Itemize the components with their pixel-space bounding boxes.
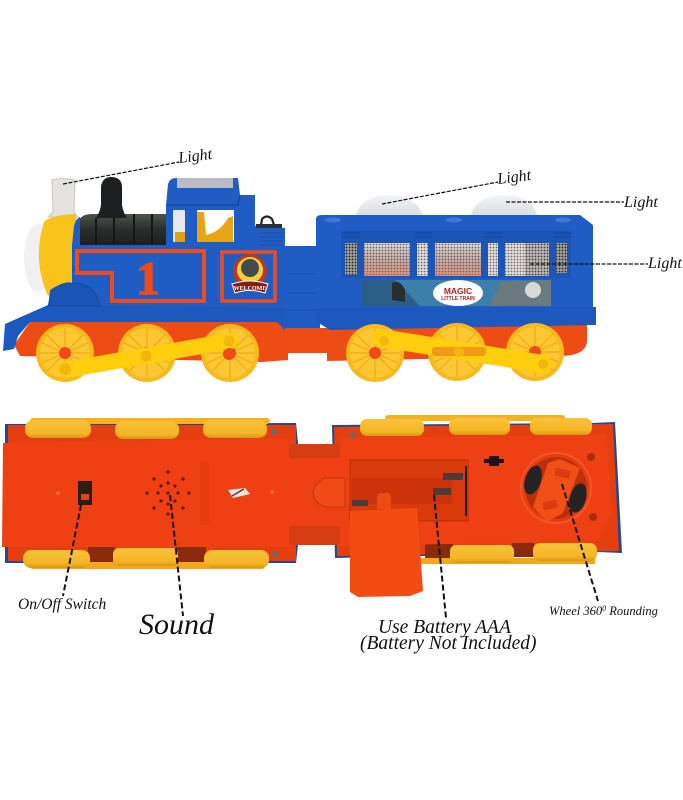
connector bar inner — [288, 458, 341, 526]
number panel outline — [77, 251, 204, 301]
locomotive connecting rod — [59, 336, 235, 375]
badge panel outline — [222, 252, 275, 301]
yellow smokebox — [39, 214, 76, 296]
callout: swivel wheel — [549, 484, 658, 618]
locomotive side view — [3, 177, 320, 382]
white front of boiler — [24, 224, 52, 292]
tender bottom strip — [420, 558, 595, 564]
callout: second dome light: Light — [623, 194, 658, 211]
keyhole slot — [484, 456, 504, 466]
tender base — [317, 307, 596, 330]
coupling — [285, 328, 330, 353]
orange recess — [8, 425, 296, 561]
tender top wheel strip — [385, 415, 565, 421]
tender sticker: LITTLE TRAIN — [441, 296, 475, 302]
tender sticker: MAGIC — [444, 286, 472, 296]
tender screw — [350, 432, 356, 438]
connector bar outer — [289, 444, 341, 545]
callout: sound: Sound — [139, 608, 215, 641]
callout: carriage light: Light — [647, 255, 682, 272]
underside view of tender — [288, 415, 622, 597]
callout: battery: (Battery Not Included) — [360, 633, 537, 654]
raised strip — [200, 462, 209, 525]
callout: swivel wheel: Rounding — [606, 604, 658, 618]
tender roof light domes — [356, 195, 537, 239]
tender window frame — [341, 231, 571, 278]
callout: first dome light: Light — [495, 167, 533, 188]
boiler ribs — [96, 214, 152, 244]
top wheels — [25, 420, 267, 439]
dark gaps between lower wheels — [88, 547, 115, 562]
swivel wheel housing — [521, 453, 591, 523]
bottom wheels — [23, 548, 269, 568]
locomotive wheels — [36, 324, 259, 382]
tender holes — [587, 453, 597, 521]
cab window left — [173, 210, 185, 242]
callout: swivel wheel: Wheel 360 — [549, 604, 602, 618]
locomotive body — [48, 178, 320, 328]
locomotive undercarriage — [14, 322, 288, 362]
tender base plate — [340, 435, 611, 546]
tender top wheels — [360, 418, 592, 436]
roof vent panel — [177, 178, 233, 188]
tender sticker — [362, 280, 551, 306]
callout: first dome light — [382, 167, 533, 204]
small logo mark — [228, 488, 250, 498]
cab window right — [197, 210, 234, 242]
tender carriage side view — [285, 195, 596, 382]
tender vents — [342, 233, 571, 237]
locomotive chimney light — [48, 178, 78, 217]
tender body — [316, 215, 593, 310]
dark gap between lower tender wheels — [425, 544, 453, 558]
speaker holes — [145, 470, 191, 516]
tender recess — [334, 424, 619, 556]
locomotive top wheel strip — [30, 418, 270, 424]
tender mesh windows — [345, 243, 567, 276]
on/off switch — [78, 481, 92, 505]
battery lid — [350, 493, 423, 597]
callout: battery — [360, 495, 537, 654]
battery compartment — [350, 460, 468, 521]
callout: on/off switch — [18, 505, 107, 613]
callout: chimney light — [63, 146, 214, 184]
blue shell behind tender — [332, 422, 622, 558]
tender connecting rod — [379, 336, 548, 369]
tender bottom wheels — [450, 543, 597, 563]
callout: swivel wheel: 0 — [602, 604, 606, 613]
black funnel — [96, 177, 127, 218]
locomotive chassis — [3, 305, 287, 351]
callout: on/off switch: On/Off Switch — [18, 596, 107, 613]
tow loop — [313, 478, 345, 507]
small holes — [56, 490, 274, 495]
rear step panels — [288, 274, 320, 310]
callout: battery: Use Battery AAA — [378, 617, 511, 638]
screws — [271, 429, 278, 557]
black boiler — [78, 214, 166, 245]
tender wheels — [346, 323, 564, 382]
tender undercarriage — [327, 318, 587, 361]
cab side vents — [259, 233, 283, 245]
callout: sound — [139, 495, 215, 641]
welcome badge — [232, 254, 268, 293]
wheel arch — [48, 283, 100, 306]
welcome badge: WELCOME — [234, 286, 266, 292]
underside view of locomotive — [2, 418, 298, 569]
callout: chimney light: Light — [176, 146, 214, 167]
roof hook — [261, 216, 274, 225]
locomotive bottom wheel strip — [30, 562, 265, 569]
blue shell behind locomotive — [5, 423, 298, 563]
number one: 1 — [136, 253, 160, 305]
cab roof band — [167, 195, 240, 205]
locomotive base plate — [2, 438, 290, 547]
tender roof studs — [325, 218, 571, 222]
